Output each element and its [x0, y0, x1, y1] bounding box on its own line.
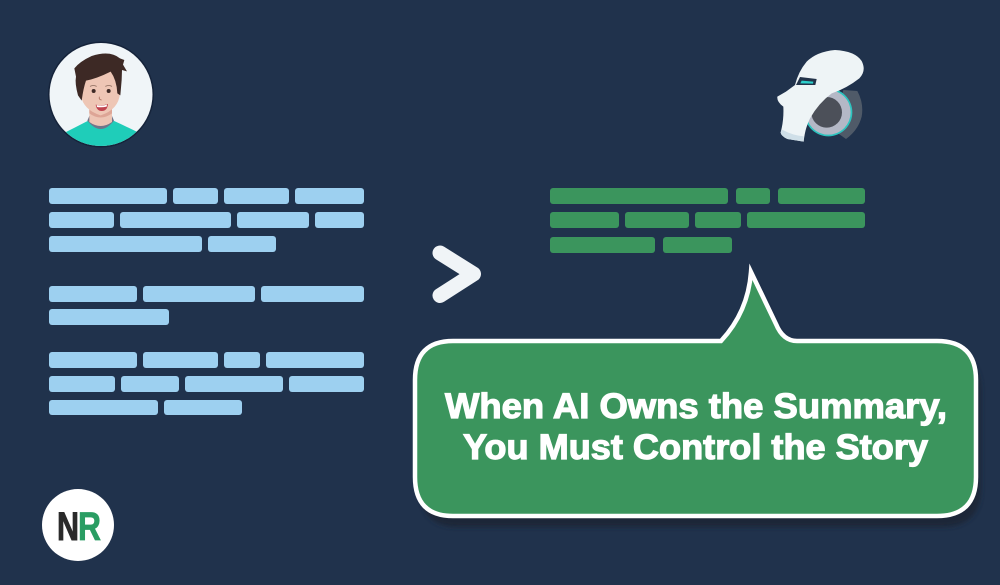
logo: NR: R [78, 505, 101, 549]
icon: human avatar [48, 42, 154, 150]
text paragraph 1 [49, 188, 364, 252]
callout heading: When AI Owns the Summary, [445, 387, 947, 426]
robot eye [796, 77, 817, 85]
text paragraph 2 [49, 286, 364, 325]
logo: NR [42, 489, 114, 561]
callout: speech bubble [415, 272, 981, 527]
callout heading: You Must Control the Story [463, 428, 929, 467]
panel: human source text [49, 188, 364, 415]
robot wheel [804, 88, 852, 136]
robot face [777, 50, 864, 142]
arrow: human to AI chevron [440, 253, 474, 296]
callout heading [445, 387, 947, 467]
logo: NR: N [57, 505, 79, 549]
robot outer wedge [833, 90, 862, 139]
text paragraph 3 [49, 352, 364, 415]
panel: AI summary text [550, 188, 865, 253]
icon: robot head [777, 50, 864, 142]
